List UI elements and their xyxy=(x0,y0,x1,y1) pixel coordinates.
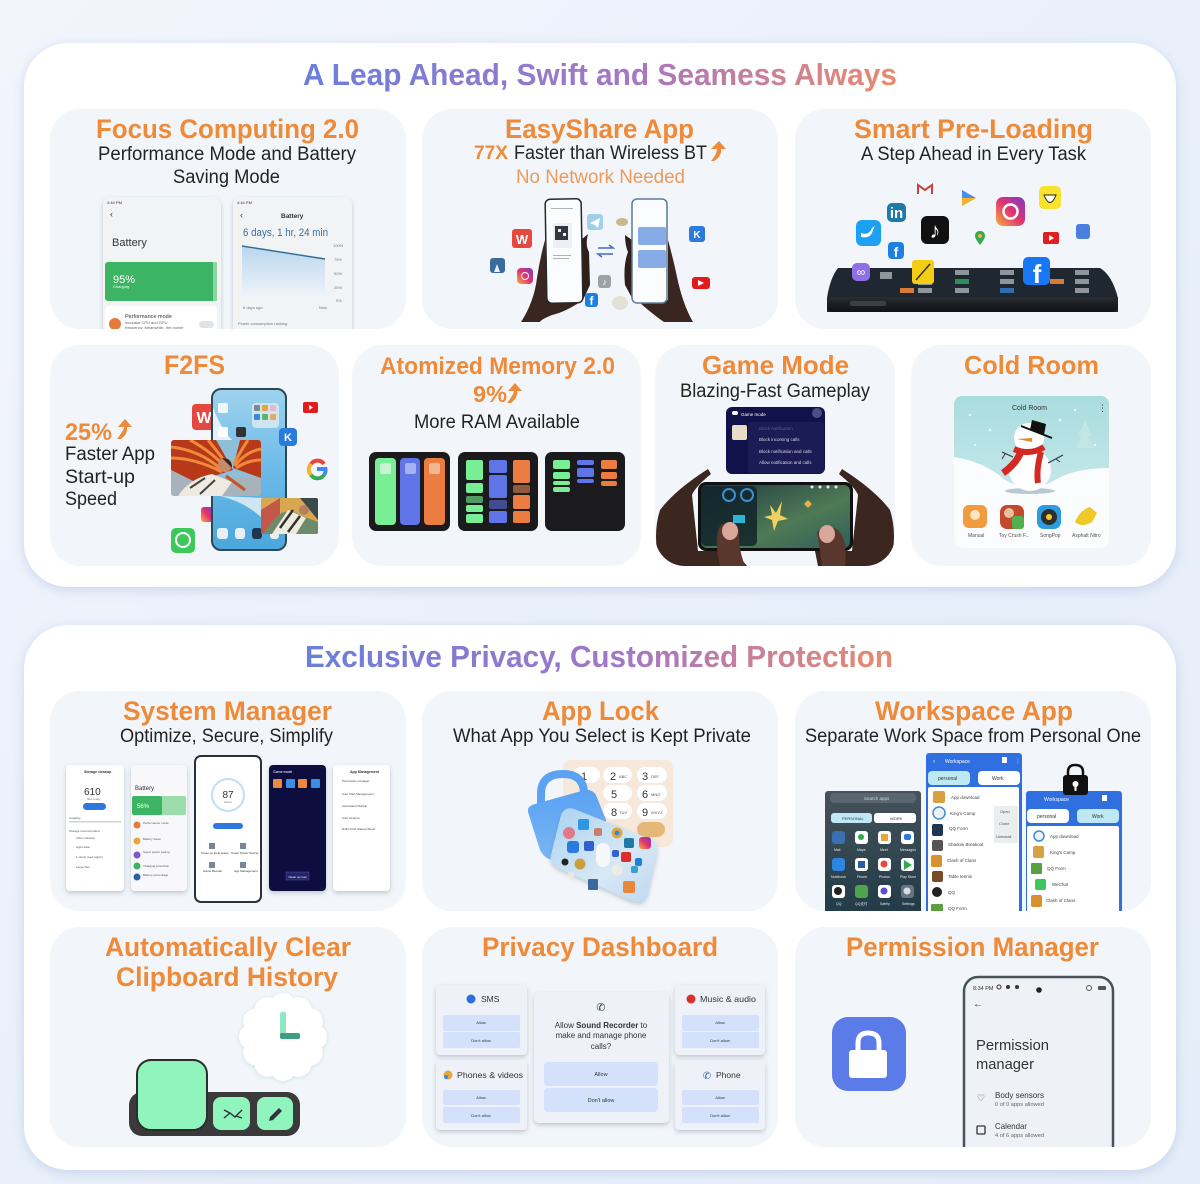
card: game mode xyxy=(655,345,895,566)
keypad: MNO xyxy=(651,792,660,797)
screen: battery charging: Battery xyxy=(112,237,147,249)
card heading: App Lock xyxy=(542,696,660,726)
screen: locked workspace: personal xyxy=(1037,814,1056,820)
keypad: 5 xyxy=(611,789,617,801)
screen: battery charging: Increase CPU and GPU xyxy=(125,320,168,325)
dialog: phones and videos xyxy=(436,1060,527,1130)
keypad: TUV xyxy=(619,810,627,815)
screen: workspace list: King's Camp xyxy=(950,811,976,816)
screen: home apps xyxy=(825,791,921,921)
photo: woman under umbrella xyxy=(171,440,261,496)
screen: battery chart: 100% xyxy=(333,243,344,248)
screen: battery chart xyxy=(233,197,352,347)
screen: home apps: Photos xyxy=(879,875,890,879)
battery screens xyxy=(103,197,352,347)
dialog: phones and videos: Phones & videos xyxy=(457,1070,523,1080)
keypad: 3 xyxy=(642,771,648,783)
screen: workspace list: Uninstall xyxy=(996,834,1011,839)
app icons: W xyxy=(516,232,529,247)
memory block: atomized xyxy=(458,452,538,531)
screen: home apps: Meet xyxy=(880,848,888,852)
screen: storage cleanup xyxy=(66,765,124,891)
app icons: ♪ xyxy=(602,277,607,287)
card subtitle: What App You Select is Kept Private xyxy=(453,726,751,747)
screen: battery chart: 25% xyxy=(334,285,342,290)
speed claim: Faster than Wireless BT xyxy=(514,143,707,164)
cold room screen xyxy=(954,396,1109,548)
screen: battery chart: 75% xyxy=(334,257,342,262)
screen: locked workspace: QQ Form xyxy=(1047,866,1066,871)
card: focus computing xyxy=(50,109,406,347)
phone lying flat xyxy=(827,268,1118,312)
screen: app management: Rollin Fast Startup Boost xyxy=(342,827,375,831)
screen: battery chart: 4:44 PM xyxy=(237,200,252,205)
phone: permission manager: 8:34 PM xyxy=(973,986,994,992)
dialog: phone: Allow xyxy=(715,1095,725,1100)
card subtitle: Saving Mode xyxy=(173,167,280,188)
screen: locked workspace: Workspace xyxy=(1044,797,1069,803)
screen: home apps: WORK xyxy=(890,816,903,821)
card heading: Focus Computing 2.0 xyxy=(96,114,359,144)
screen: battery chart: 0% xyxy=(336,298,342,303)
screen: battery chart: 50% xyxy=(334,271,342,276)
screen: battery charging: frequency. Meanwhile, the power xyxy=(125,325,184,330)
card heading: Privacy Dashboard xyxy=(482,932,718,962)
screen: game mode: Game mode xyxy=(273,770,292,774)
screen: optimization score: Clean up local space xyxy=(201,851,229,855)
screen: battery: Performance mode xyxy=(143,821,169,825)
stat: 25 percent: 25% xyxy=(65,419,112,446)
screen: workspace list: QQ xyxy=(948,890,956,895)
screen: battery chart: Now xyxy=(319,305,327,310)
screen: app management: Auto cleanup xyxy=(342,816,360,820)
screen: workspace list: ‹ xyxy=(933,759,935,765)
screen: locked workspace: King's Camp xyxy=(1050,850,1076,855)
phone: permission manager: ♡ xyxy=(977,1093,985,1103)
floating app icons: ∞ xyxy=(857,265,865,279)
screen: battery chart: ‹ xyxy=(240,210,243,220)
screen: workspace list: QQ Form xyxy=(949,826,968,831)
screen: optimization score: Score xyxy=(224,800,232,804)
phone: permission manager: ← xyxy=(973,999,983,1010)
card subtitle: Optimize, Secure, Simplify xyxy=(120,726,333,747)
card heading: System Manager xyxy=(123,696,332,726)
screen: storage cleanup: Apps data xyxy=(76,845,90,849)
screen: app management: Permission manager xyxy=(342,779,370,783)
screen: locked workspace: Work xyxy=(1092,814,1104,820)
card: f2fs xyxy=(50,345,339,566)
screen: battery: 56% xyxy=(137,804,150,810)
card: permission manager xyxy=(795,927,1151,1167)
keypad: 2 xyxy=(610,771,616,783)
dialog: sms xyxy=(436,985,527,1055)
screen: app management xyxy=(333,765,390,891)
game mode menu: Block incoming calls xyxy=(759,437,800,442)
screen: storage cleanup: 1 rarely used app(s) xyxy=(76,855,103,859)
screen: home apps: Messages xyxy=(900,848,916,852)
card heading: F2FS xyxy=(164,350,225,380)
card heading: Game Mode xyxy=(702,350,849,380)
screen: home apps: Mail xyxy=(834,848,841,852)
cold room screen: ⋮ xyxy=(1098,403,1107,413)
left hand and phone xyxy=(521,199,590,322)
screen: battery charging: 95% xyxy=(113,274,135,286)
dialog: phone: ✆ xyxy=(703,1071,711,1082)
screen: storage cleanup: files ready xyxy=(87,797,101,801)
screen: battery chart: Battery xyxy=(281,213,304,220)
screen: home apps: Safety xyxy=(880,902,890,906)
screen: optimization score xyxy=(195,756,261,902)
padlock xyxy=(528,774,606,860)
dialog: phones and videos: Don't allow xyxy=(471,1113,491,1118)
screen: workspace list: ⋮ xyxy=(1015,758,1021,765)
dialog: sound recorder xyxy=(534,992,669,1123)
game mode menu: Game mode xyxy=(741,412,766,417)
dialog: music and audio: Don't allow xyxy=(710,1038,730,1043)
dialog: sound recorder: calls? xyxy=(591,1042,612,1051)
screen: home apps: Maps xyxy=(857,848,866,852)
screen: app management: Associated Startup xyxy=(342,804,368,808)
phone with photos: W xyxy=(196,410,212,427)
phone with photos xyxy=(171,389,326,553)
phone: permission manager: 4 of 6 apps allowed xyxy=(995,1133,1044,1139)
screen: workspace list: Clash of Clans xyxy=(947,858,977,863)
screen: home apps: Settings xyxy=(902,902,915,906)
screen: optimization score: Smart Power Saving xyxy=(231,851,259,855)
phone: permission manager: Permission xyxy=(976,1037,1049,1054)
keypad: 9 xyxy=(642,807,648,819)
screen: storage cleanup: Capacity xyxy=(69,816,81,820)
screen: battery: Super power saving xyxy=(143,850,170,854)
screen: storage cleanup: Storage cleanup xyxy=(84,770,111,774)
dialog: sms: SMS xyxy=(481,994,500,1004)
card: clipboard history xyxy=(50,927,406,1147)
screen: workspace list: QQ Form xyxy=(948,906,967,911)
screen: game mode xyxy=(269,765,326,891)
app icons: f xyxy=(590,294,594,308)
stat: 9 percent xyxy=(473,381,522,407)
screen: home apps: Notebook xyxy=(831,875,846,879)
widget bar xyxy=(129,1060,300,1136)
stat: 9 percent: 9% xyxy=(473,381,507,407)
screen: battery: Battery percentage xyxy=(143,873,169,877)
keypad xyxy=(563,760,673,847)
dialog: sound recorder: ✆ xyxy=(596,1002,606,1014)
screen: battery charging: Performance mode xyxy=(125,314,172,320)
screen: battery chart: 6 days, 1 hr, 24 min xyxy=(243,227,328,239)
card: cold room xyxy=(911,345,1151,566)
screen: battery: Battery Saver xyxy=(143,837,161,841)
keypad: ABC xyxy=(619,774,627,779)
phone: permission manager: manager xyxy=(976,1056,1034,1073)
icon: app lock tile xyxy=(832,1017,906,1091)
floating app icons: ♪ xyxy=(930,218,940,243)
stat description: Speed xyxy=(65,489,117,510)
panel: swift and seamless xyxy=(24,43,1176,587)
card subtitle: Separate Work Space from Personal One xyxy=(805,726,1141,747)
screen: locked workspace: Clash of Clans xyxy=(1046,898,1076,903)
card subtitle: A Step Ahead in Every Task xyxy=(861,144,1086,165)
card heading: Workspace App xyxy=(875,696,1073,726)
screen: workspace list: Shadow Breakout xyxy=(948,842,984,847)
memory block: whole xyxy=(369,452,450,531)
screen: locked workspace xyxy=(1026,791,1122,919)
screen: battery charging: ‹ xyxy=(110,209,113,219)
share arrows xyxy=(598,245,613,257)
card subtitle: Performance Mode and Battery xyxy=(98,144,356,165)
game mode menu: Block notification xyxy=(759,426,793,431)
room apps: Toy Crush F... xyxy=(999,533,1030,539)
screen: home apps: PERSONAL xyxy=(842,816,865,821)
icon: lock xyxy=(1063,765,1088,795)
card subtitle: Blazing-Fast Gameplay xyxy=(680,381,870,402)
icon: google xyxy=(309,461,326,478)
screen: locked workspace: WeChat xyxy=(1052,882,1069,887)
game mode menu xyxy=(726,407,825,474)
dialog: phone xyxy=(675,1060,765,1130)
screen: home apps: Search apps xyxy=(864,796,890,801)
room apps: Manual xyxy=(968,533,984,539)
screen: workspace list: App download xyxy=(951,795,980,800)
dialog: sms: Don't allow xyxy=(471,1038,491,1043)
screen: workspace list: Open xyxy=(1000,809,1010,814)
stat description: Start-up xyxy=(65,467,135,488)
card: easyshare xyxy=(422,109,778,329)
screen: battery: Battery xyxy=(135,786,154,792)
stat description: More RAM Available xyxy=(414,412,580,433)
dialog: music and audio xyxy=(675,985,765,1055)
screen: battery charging: 4:44 PM xyxy=(107,200,122,205)
keypad: DEF xyxy=(651,774,660,779)
dialog: music and audio: Allow xyxy=(715,1020,725,1025)
card: privacy dashboard xyxy=(422,927,778,1147)
screen: optimization score: 87 xyxy=(222,790,234,801)
screen: storage cleanup: Storage recommended xyxy=(69,829,100,833)
screen: battery chart: Power consumption ranking xyxy=(238,321,287,326)
screen: workspace list: Workspace xyxy=(945,759,970,765)
screen: optimization score: App Management xyxy=(234,869,258,873)
card: app lock xyxy=(422,691,778,911)
stat description: Faster App xyxy=(65,444,155,465)
dialog: phone: Phone xyxy=(716,1070,741,1080)
card heading: Permission Manager xyxy=(846,932,1099,962)
room apps: Asphalt Nitro xyxy=(1072,533,1101,539)
snowman xyxy=(1002,420,1063,494)
keypad: WXYZ xyxy=(651,810,663,815)
screen: game mode: Clean up now xyxy=(288,875,307,879)
screen: storage cleanup: 610 xyxy=(84,787,101,798)
screen: workspace list: Clone xyxy=(999,821,1010,826)
section heading: A Leap Ahead, Swift and Seamess Always xyxy=(303,57,897,92)
card: smart pre-loading xyxy=(795,109,1151,329)
screen: battery charging xyxy=(103,197,221,347)
screen: app management: App Management xyxy=(350,770,380,774)
phone: permission manager: 0 of 0 apps allowed xyxy=(995,1102,1044,1108)
dialog: phones and videos: Allow xyxy=(476,1095,486,1100)
screen: home apps: Play Store xyxy=(900,875,916,879)
keypad: 1 xyxy=(581,771,587,783)
card: workspace app xyxy=(795,691,1151,921)
screen: battery charging: Charging xyxy=(113,284,129,289)
network note: No Network Needed xyxy=(516,167,685,188)
icon: clock xyxy=(239,993,327,1081)
room apps: SongPop xyxy=(1040,533,1061,539)
screen: battery chart: 6 days ago xyxy=(243,305,263,310)
speed claim: 77X xyxy=(474,143,508,164)
screen: locked workspace: App download xyxy=(1050,834,1079,839)
keypad: 8 xyxy=(611,807,617,819)
dialog: sms: Allow xyxy=(476,1020,486,1025)
dialog: phone: Don't allow xyxy=(710,1113,730,1118)
screen: battery xyxy=(131,765,187,891)
screen: app management: Auto Start Management xyxy=(342,792,374,796)
floating app icons: f xyxy=(1033,259,1042,289)
screen: storage cleanup: Large files xyxy=(76,865,90,869)
phone with photos: K xyxy=(284,432,292,444)
floating app icons: in xyxy=(890,205,903,222)
dialog: sound recorder: Allow xyxy=(594,1072,608,1078)
card heading: Automatically Clear xyxy=(105,932,351,962)
memory block: compact xyxy=(545,452,625,531)
photo: striped shirt xyxy=(261,498,318,534)
app icons xyxy=(490,214,710,310)
screen: optimization score: Game Booster xyxy=(203,869,222,873)
floating app icons xyxy=(852,185,1090,289)
screen: storage cleanup: Video cleanup xyxy=(76,836,95,840)
dialog: sound recorder: make and manage phone xyxy=(556,1031,647,1040)
screen: home apps: QQ支付 xyxy=(855,901,868,906)
phone: permission manager: Body sensors xyxy=(995,1090,1044,1100)
dialog: sound recorder: Allow Sound Recorder to xyxy=(555,1021,648,1030)
screen: workspace list xyxy=(926,753,1022,918)
screen: workspace list: personal xyxy=(938,776,957,782)
dialog: music and audio: Music & audio xyxy=(700,994,756,1004)
screen: battery: Charging protection xyxy=(143,864,170,868)
card heading: Clipboard History xyxy=(116,962,338,992)
card heading: Atomized Memory 2.0 xyxy=(380,353,615,380)
room apps xyxy=(963,505,1101,539)
hands holding phone xyxy=(656,469,894,566)
glass card of apps xyxy=(551,808,657,902)
card: atomized memory xyxy=(352,345,641,566)
card heading: EasyShare App xyxy=(505,114,694,144)
screen: home apps: QQ xyxy=(836,902,842,906)
screen: workspace list: Table tennis xyxy=(948,874,973,879)
section heading: Exclusive Privacy, Customized Protection xyxy=(305,639,893,674)
floating app icons: f xyxy=(894,244,899,260)
card: system manager xyxy=(50,691,406,911)
panel: privacy and protection xyxy=(24,625,1176,1170)
app icons: K xyxy=(693,230,701,241)
keypad: 6 xyxy=(642,789,648,801)
card heading: Smart Pre-Loading xyxy=(854,114,1093,144)
phone: permission manager xyxy=(964,977,1113,1167)
phone: permission manager: Calendar xyxy=(995,1121,1027,1131)
cold room screen: Cold Room xyxy=(1012,405,1047,412)
game mode menu: Allow notification and calls xyxy=(759,460,812,465)
game mode menu: Block notification and calls xyxy=(759,449,813,454)
right hand and phone xyxy=(624,199,693,322)
dialog: sound recorder: Don't allow xyxy=(588,1098,614,1104)
card heading: Cold Room xyxy=(964,350,1099,380)
screen: workspace list: Work xyxy=(992,776,1004,782)
screen: home apps: Phone xyxy=(857,875,867,879)
